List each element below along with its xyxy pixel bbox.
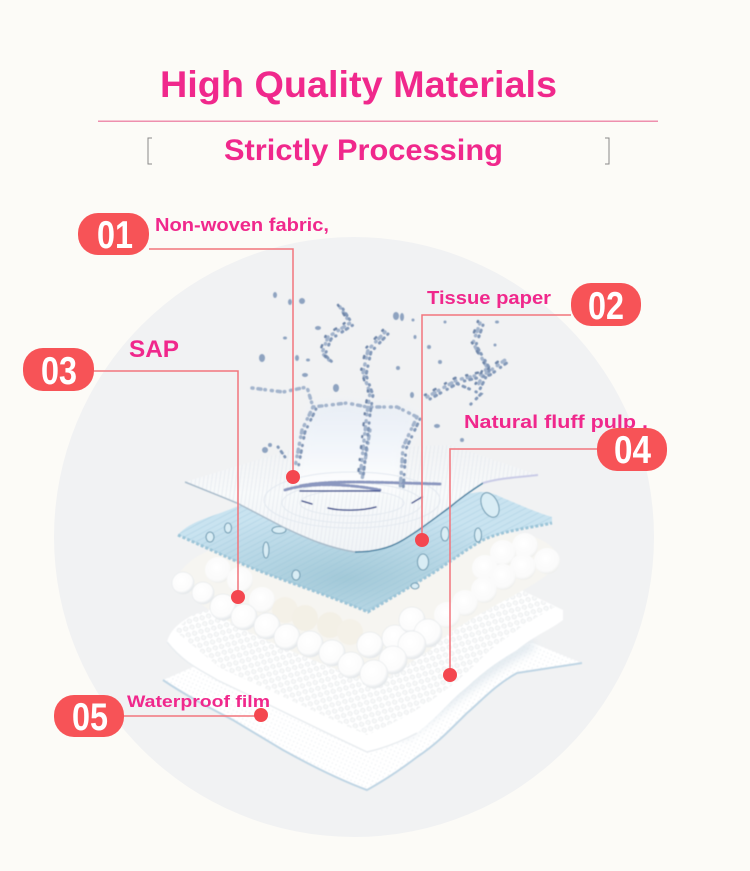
callout 02: tissue paper [415, 283, 641, 547]
layer: tissue paper [178, 490, 552, 612]
product layers illustration [163, 292, 582, 790]
title: High Quality Materials [160, 64, 557, 105]
layer: waterproof film [163, 643, 582, 790]
callout 01: non-woven fabric [78, 213, 329, 484]
callout 05: waterproof film [54, 692, 270, 739]
callout 04: natural fluff pulp [443, 412, 667, 682]
callout 01: non-woven fabric: Non-woven fabric, [155, 215, 329, 235]
background circle [54, 237, 654, 837]
water splash [252, 292, 508, 528]
layer: SAP balls [172, 533, 560, 688]
callout 05: waterproof film: 05 [72, 696, 108, 739]
title divider [98, 120, 658, 122]
callout 05: waterproof film: Waterproof film [127, 692, 270, 711]
callout 01: non-woven fabric: 01 [97, 214, 133, 257]
callout 03: SAP [23, 336, 245, 604]
callout 03: SAP: SAP [129, 336, 179, 363]
subtitle with brackets [148, 134, 609, 167]
callout 03: SAP: 03 [41, 350, 77, 393]
layer: fluff pulp pad [167, 580, 563, 752]
callout 02: tissue paper: 02 [588, 285, 624, 328]
callout 04: natural fluff pulp: Natural fluff pulp . [464, 412, 648, 432]
subtitle with brackets: Strictly Processing [224, 134, 503, 167]
callout 04: natural fluff pulp: 04 [614, 429, 651, 472]
layer: non-woven top sheet [185, 445, 538, 552]
callout 02: tissue paper: Tissue paper [427, 288, 551, 308]
